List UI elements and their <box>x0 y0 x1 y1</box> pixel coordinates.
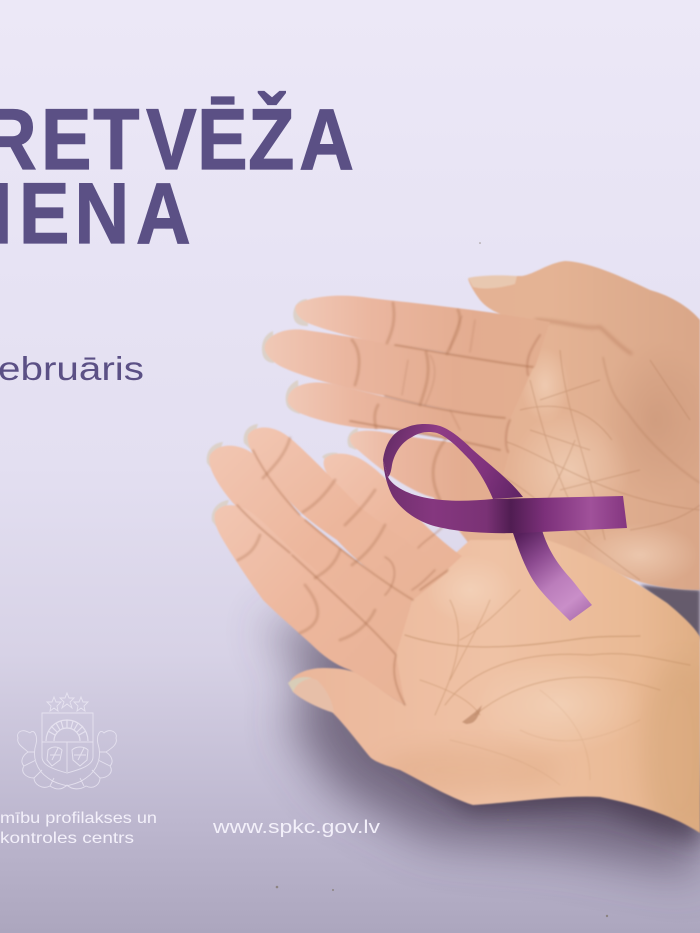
emblem lions <box>47 747 88 766</box>
nail: ring <box>286 380 300 414</box>
nail: finger 1 lower <box>244 424 258 449</box>
lower hand <box>207 424 700 840</box>
emblem shield <box>42 713 93 773</box>
finger 2 lower <box>209 446 413 655</box>
title <box>0 90 354 262</box>
nail: finger 2 lower <box>207 442 223 471</box>
pinky finger upper <box>350 431 510 505</box>
middle finger upper <box>265 329 535 419</box>
upper palm shading <box>500 320 700 587</box>
lower palm and thumb <box>289 540 700 833</box>
organisation line one: mību profilakses un <box>0 810 157 827</box>
website: www.spkc.gov.lv <box>212 817 380 837</box>
ribbon tail <box>512 530 592 621</box>
finger 3 lower <box>214 505 405 705</box>
nail: pinky <box>347 428 358 450</box>
organisation name <box>0 810 157 847</box>
ribbon upper loop <box>383 424 523 499</box>
finger creases upper <box>350 303 540 500</box>
finger 4 lower <box>324 454 462 590</box>
nail: middle <box>262 331 274 363</box>
date: ebruāris <box>0 350 144 387</box>
emblem sun <box>46 720 88 741</box>
nail: index <box>293 299 308 326</box>
nail: finger 3 lower <box>212 500 229 529</box>
finger creases lower <box>237 438 448 705</box>
emblem <box>18 693 116 789</box>
emblem oak wreath <box>18 731 116 789</box>
nail: thumb upper <box>468 275 517 288</box>
emblem stars <box>47 693 88 711</box>
nail: finger 4 lower <box>322 453 338 462</box>
upper hand <box>262 261 700 590</box>
finger 1 lower <box>248 427 448 600</box>
emblem shield divisions <box>42 742 93 772</box>
upper palm and thumb <box>420 261 700 590</box>
lower palm shading <box>392 570 690 822</box>
organisation line two: kontroles centrs <box>0 830 134 847</box>
index finger upper <box>296 296 550 367</box>
ring finger upper <box>288 383 510 455</box>
purple awareness ribbon <box>383 424 627 621</box>
thumb nail lower <box>288 678 334 713</box>
ribbon band and lower loop <box>383 460 627 533</box>
thumb nail rim <box>288 677 312 692</box>
